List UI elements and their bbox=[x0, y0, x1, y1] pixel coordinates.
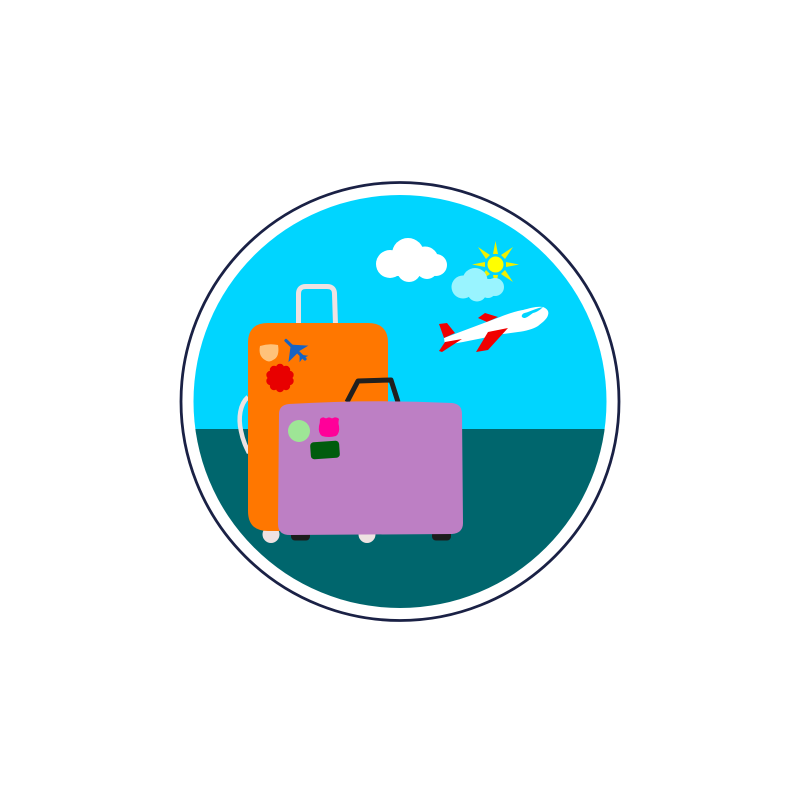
wheel: orange case bbox=[262, 526, 280, 543]
fuselage bbox=[444, 307, 548, 345]
purple case handle bbox=[347, 380, 398, 402]
travel badge illustration bbox=[180, 181, 620, 622]
sky bbox=[190, 190, 610, 429]
orange suitcase bbox=[248, 323, 388, 531]
sticker: peach shield bbox=[260, 344, 278, 362]
feet: purple case bbox=[291, 530, 451, 540]
icon: white cloud bbox=[376, 238, 447, 282]
sticker: red seal bbox=[266, 364, 294, 392]
cockpit window bbox=[522, 307, 543, 318]
icon: light blue cloud bbox=[452, 268, 504, 302]
icon: airplane bbox=[439, 307, 548, 352]
sticker: green circle bbox=[288, 420, 310, 442]
ground bbox=[190, 429, 610, 614]
scene background bbox=[190, 190, 610, 614]
sticker: blue plane bbox=[286, 340, 307, 361]
sticker: green label bbox=[310, 441, 340, 459]
tail stabilizer bbox=[439, 339, 462, 352]
tail fin bbox=[439, 323, 455, 338]
wheel: purple case front bbox=[358, 526, 376, 543]
far wing bbox=[478, 313, 498, 322]
side strap: orange case bbox=[240, 397, 249, 453]
near wing bbox=[476, 328, 508, 352]
suitcase handle: orange case bbox=[298, 286, 336, 325]
icon: sun bbox=[472, 241, 519, 288]
outer ring bbox=[181, 182, 619, 620]
purple suitcase bbox=[278, 401, 463, 535]
sticker: pink shield bbox=[319, 417, 339, 437]
